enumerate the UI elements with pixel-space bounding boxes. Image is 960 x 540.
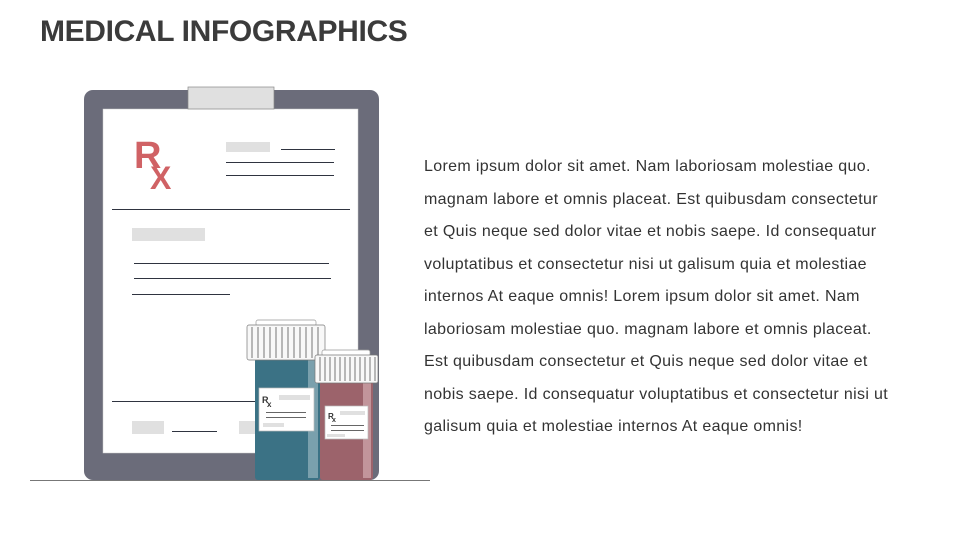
body text	[424, 158, 888, 435]
body text: internos At eaque omnis! Lorem ipsum dolor sit amet. Nam	[424, 288, 860, 305]
body text: magnam labore et omnis placeat. Est quibusdam consectetur	[424, 191, 878, 208]
body text: Lorem ipsum dolor sit amet. Nam laboriosam molestiae quo.	[424, 158, 871, 175]
body text: laboriosam molestiae quo. magnam labore et omnis placeat.	[424, 321, 872, 338]
body text: Est quibusdam consectetur et Quis neque sed dolor vitae et	[424, 353, 868, 370]
title: MEDICAL INFOGRAPHICS	[40, 15, 407, 48]
clipboard	[84, 87, 379, 480]
rx symbol: R	[134, 135, 161, 177]
bottle: red: x	[332, 417, 336, 424]
body text: et Quis neque sed dolor vitae et nobis saepe. Id consequatur	[424, 223, 876, 240]
rx symbol	[134, 135, 172, 196]
bottle: teal: x	[267, 400, 272, 409]
body text: voluptatibus et consectetur nisi ut galisum quia et molestiae	[424, 256, 867, 273]
bottle: teal	[247, 320, 325, 480]
bottle: red	[315, 350, 378, 480]
bottle: red: R	[328, 412, 334, 421]
rx symbol: X	[150, 160, 172, 196]
body text: nobis saepe. Id consequatur voluptatibus et consectetur nisi ut	[424, 386, 888, 403]
bottle: teal: R	[262, 395, 269, 405]
body text: galisum quia et molestiae internos At eaque omnis!	[424, 418, 803, 435]
floor line	[30, 480, 430, 482]
